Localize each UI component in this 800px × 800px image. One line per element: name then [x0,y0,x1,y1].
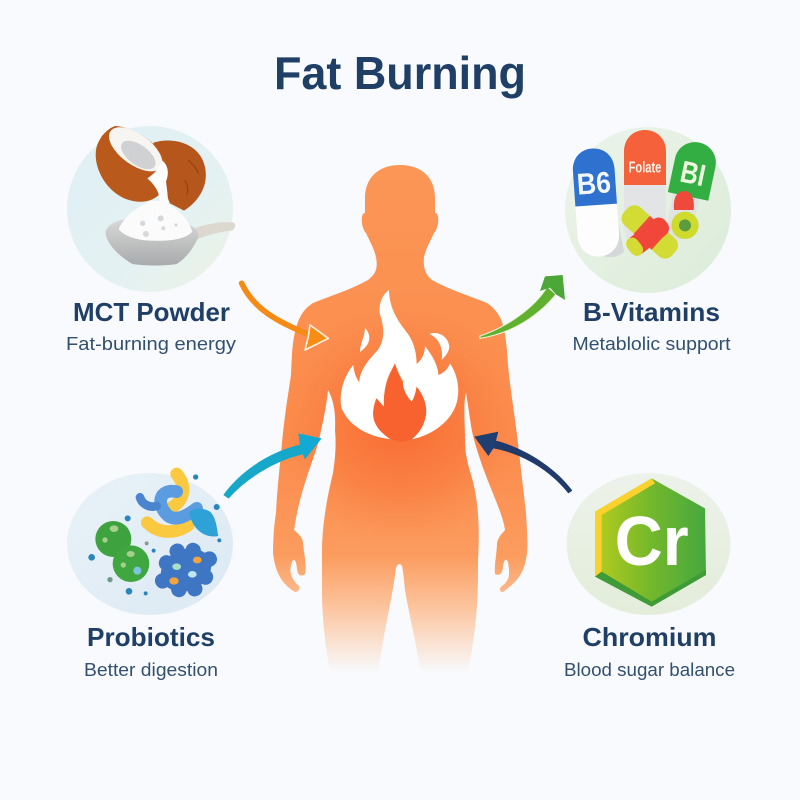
icon: chromium hexagon [595,478,706,607]
capsule: B6 [571,147,621,258]
blob: chromium background [566,473,730,615]
capsule: folate [624,130,666,245]
label: MCT Powder [66,297,236,354]
label: Chromium [564,622,735,680]
blob: vitamins background [565,127,731,293]
label: Probiotics [84,622,218,680]
coconut back half [153,140,206,211]
blob: probiotics background [67,473,233,615]
flame core [373,363,426,442]
mini pill cross [618,201,682,262]
arrow: green [480,275,565,338]
flame wisp left [360,328,369,352]
arrow: navy [474,432,572,493]
caption: Fat-burning energy [66,334,236,354]
label: MCT Powder: MCT Powder [73,297,230,327]
spores [88,474,221,595]
icon: flame [341,290,458,442]
blue bacterium [161,491,197,518]
caption: Blood sugar balance [564,660,735,680]
mini donut pill [671,212,699,239]
capsule: B6: B6 [576,166,612,202]
yellow bacterium arc [167,474,183,510]
caption: Metablolic support [572,334,730,354]
label: B-Vitamins: B-Vitamins [583,297,720,327]
capsule: B1 [658,138,720,247]
powder pile [119,201,192,241]
icon: vitamin capsules [571,130,720,262]
capsule: B1: BI [677,155,708,193]
icon: probiotics [88,474,228,610]
label: Chromium: Chromium [582,622,716,652]
title: Fat Burning [274,47,526,99]
teal microbe [189,509,218,536]
hexagon bevel [595,478,655,577]
symbol Cr: Cr [615,502,689,580]
capsule shadow [603,203,624,257]
coconut flesh [102,119,170,180]
flame wisp right [429,333,449,360]
powder stream [147,160,168,207]
gear microbe [144,530,228,610]
coconut front half [96,126,166,202]
body silhouette [273,165,528,666]
label: Probiotics: Probiotics [87,622,215,652]
mini capsule [674,191,694,210]
arrow: orange [242,283,328,350]
caption: Better digestion [84,660,218,680]
icon: coconut powder [96,119,235,265]
capsule: folate: Folate [629,159,661,176]
yellow bacterium lower [147,523,188,532]
bowl handle [187,222,235,242]
hexagon lower bevel [595,570,706,607]
coconut cavity [116,135,160,175]
green cells [95,521,131,557]
arrow: cyan [223,433,322,499]
bowl [106,218,198,265]
blob: coconut background [67,126,233,292]
label: B-Vitamins [572,297,730,354]
